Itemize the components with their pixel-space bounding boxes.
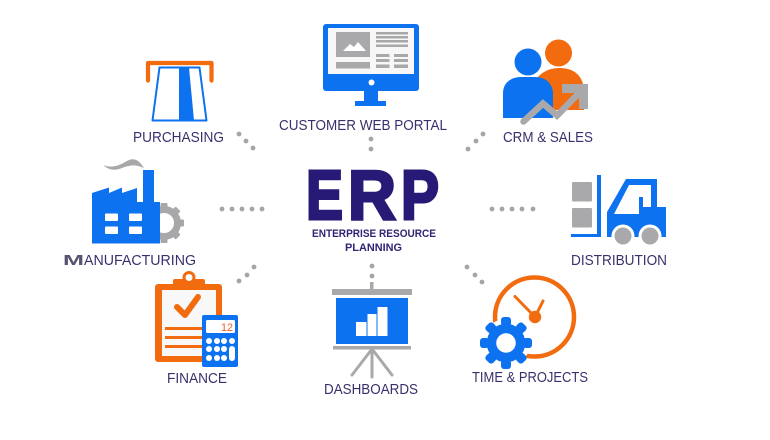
distribution module <box>571 175 667 269</box>
center title: ERP: P <box>401 156 439 234</box>
label: M <box>63 252 84 269</box>
purchasing module <box>133 63 224 146</box>
label: CUSTOMER WEB PORTAL <box>279 117 447 134</box>
crm and sales module <box>503 40 593 146</box>
icon: presentation board <box>332 282 412 377</box>
connector dots <box>220 132 535 284</box>
icon: forklift <box>571 175 666 248</box>
subtitle <box>312 228 436 254</box>
center title: ERP <box>306 156 439 254</box>
label: CRM & SALES <box>503 129 593 146</box>
center title: ERP: E <box>306 156 343 234</box>
label: FINANCE <box>167 370 227 387</box>
subtitle: ENTERPRISE RESOURCE <box>312 228 436 240</box>
dashboards module <box>324 282 418 398</box>
icon: factory with gear <box>92 159 184 244</box>
customer web portal module <box>279 24 447 134</box>
label: PURCHASING <box>133 129 224 146</box>
subtitle: PLANNING <box>345 242 402 254</box>
icon: clock with gear <box>480 278 574 369</box>
center title: ERP: R <box>348 156 396 234</box>
label: DISTRIBUTION <box>571 252 667 269</box>
label: ANUFACTURING <box>84 252 196 269</box>
label: DASHBOARDS <box>324 381 418 398</box>
icon: people with rising arrow <box>503 40 588 122</box>
label: TIME & PROJECTS <box>472 369 588 386</box>
icon: clipboard with calculator: 12 <box>221 322 233 334</box>
icon: card in slot <box>148 63 212 120</box>
finance module <box>155 272 238 387</box>
time and projects module <box>472 278 588 386</box>
icon: monitor <box>323 24 419 106</box>
manufacturing module <box>63 159 196 269</box>
